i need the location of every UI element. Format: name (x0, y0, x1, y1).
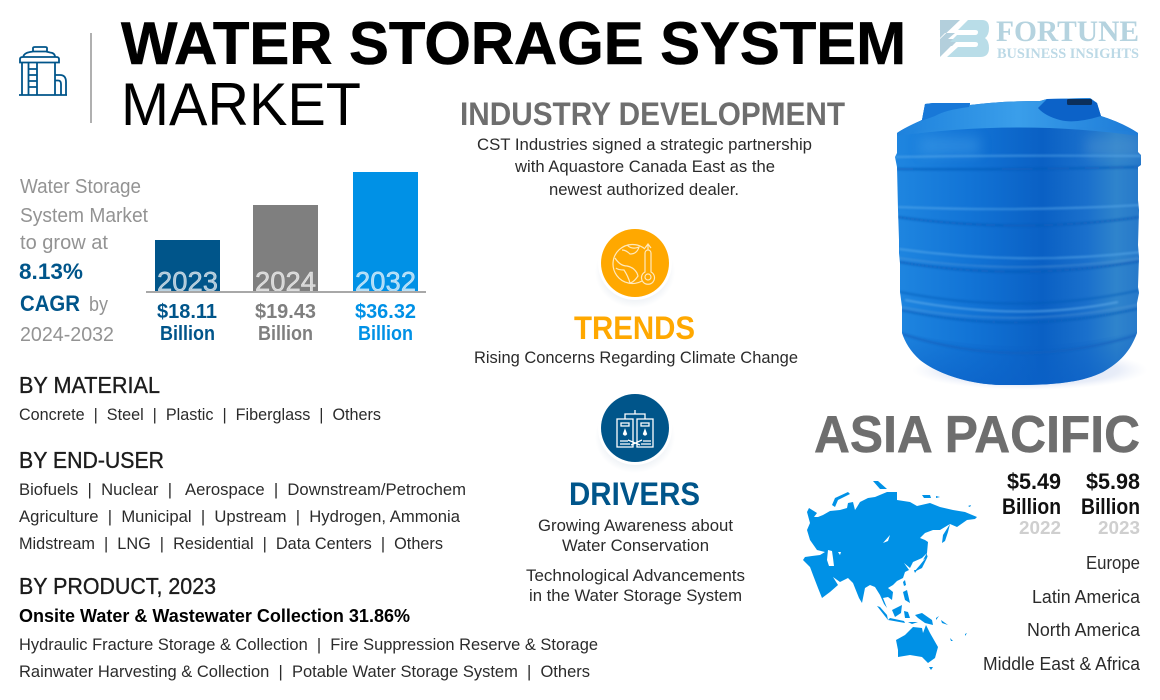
section: by material: Concrete | Steel | Plastic | Fiberglass | Others (19, 405, 381, 424)
logo: Fortune Business Insights: BUSINESS INSIGHTS (997, 46, 1139, 62)
list: other regions (983, 553, 1141, 674)
title: WATER STORAGE SYSTEM (121, 10, 906, 77)
bar: 2032: 2032 (355, 266, 416, 297)
section: by product: Rainwater Harvesting & Collection | Potable Water Storage System | Others (19, 662, 590, 681)
section: by product: Onsite Water & Wastewater Collection 31.86% (19, 606, 410, 626)
bar chart: market size (146, 172, 426, 345)
logo: Fortune Business Insights: FORTUNE (996, 15, 1139, 48)
text: market growth summary: to grow at (20, 232, 108, 254)
list: other regions: Middle East & Africa (983, 654, 1141, 674)
section: by end-user: Biofuels | Nuclear | Aerospace | Downstream/Petrochem (19, 480, 466, 499)
logo: Fortune Business Insights (940, 15, 1139, 62)
list: other regions: Europe (1086, 553, 1140, 573)
stats: Asia Pacific market size 2023: $5.98 (1086, 469, 1140, 494)
list: other regions: Latin America (1032, 587, 1141, 607)
section: by material (19, 372, 381, 424)
divider (90, 33, 92, 123)
section: drivers (526, 476, 745, 605)
section: industry development (460, 96, 845, 199)
section: industry development: with Aquastore Canada East as the (514, 157, 775, 176)
section: drivers: Growing Awareness about (538, 516, 733, 535)
section: by product: Hydraulic Fracture Storage & Collection | Fire Suppression Reserve & Storage (19, 635, 598, 654)
bar: 2023: 2023 (157, 266, 218, 297)
title: MARKET (121, 71, 361, 138)
section: by end-user: BY END-USER (19, 447, 164, 473)
section: by product (19, 573, 598, 681)
section: industry development: CST Industries signed a strategic partnership (477, 135, 812, 154)
section: drivers: in the Water Storage System (529, 586, 742, 605)
bar: 2024 (253, 205, 318, 345)
map: Asia Pacific (803, 481, 977, 670)
bar: 2023: Billion (160, 323, 215, 345)
section: trends: TRENDS (574, 310, 695, 346)
stats: Asia Pacific market size 2022: $5.49 (1007, 469, 1061, 494)
bar: 2024: $19.43 (255, 301, 316, 323)
bar: 2032: Billion (358, 323, 413, 345)
bar: 2032 (353, 172, 418, 345)
section: drivers: DRIVERS (569, 476, 700, 512)
stats: Asia Pacific market size 2022 (1002, 469, 1061, 538)
text: market growth summary: by (89, 294, 108, 316)
stats: Asia Pacific market size 2023 (1081, 469, 1140, 538)
icon: drivers water storage units (595, 391, 675, 473)
section: drivers: Water Conservation (562, 536, 709, 555)
section: industry development: newest authorized dealer. (549, 180, 739, 199)
image: blue water tank (890, 90, 1148, 390)
heading: Asia Pacific: ASIA PACIFIC (814, 406, 1140, 464)
text: market growth summary: 2024-2032 (20, 324, 114, 346)
stats: Asia Pacific market size 2022: Billion (1002, 494, 1061, 519)
text: market growth summary: 8.13% (19, 259, 83, 284)
bar: 2023: $18.11 (157, 301, 217, 323)
section: drivers: Technological Advancements (526, 566, 745, 585)
bar: 2032: $36.32 (355, 301, 416, 323)
section: by material: BY MATERIAL (19, 372, 160, 398)
stats: Asia Pacific market size 2023: Billion (1081, 494, 1140, 519)
stats: Asia Pacific market size 2022: 2022 (1019, 518, 1061, 538)
section: by product: BY PRODUCT, 2023 (19, 573, 216, 599)
text: market growth summary: CAGR (20, 291, 80, 316)
icon: water tank (19, 47, 67, 95)
bar: 2024: Billion (258, 323, 313, 345)
stats: Asia Pacific market size 2023: 2023 (1098, 518, 1140, 538)
section: industry development: INDUSTRY DEVELOPMENT (460, 96, 845, 132)
section: trends: Rising Concerns Regarding Climate Change (474, 348, 798, 367)
section: by end-user: Midstream | LNG | Residential | Data Centers | Others (19, 534, 443, 553)
text: market growth summary: Water Storage (20, 176, 141, 198)
list: other regions: North America (1027, 620, 1141, 640)
icon: trends globe and thermometer (595, 226, 675, 308)
text: market growth summary: System Market (20, 205, 148, 227)
text: market growth summary (19, 176, 148, 346)
section: trends (474, 310, 798, 367)
section: by end-user (19, 447, 466, 553)
section: by end-user: Agriculture | Municipal | Upstream | Hydrogen, Ammonia (19, 507, 461, 526)
bar: 2023 (155, 240, 220, 345)
bar: 2024: 2024 (255, 266, 316, 297)
title (121, 10, 906, 138)
